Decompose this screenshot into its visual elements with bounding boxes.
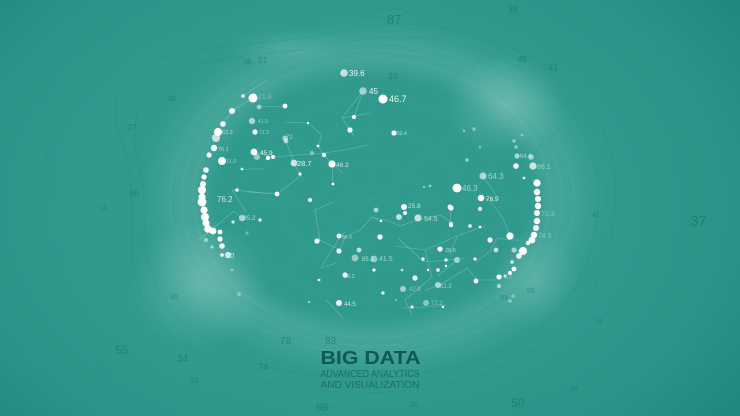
background numbers: 30 bbox=[170, 294, 178, 301]
background numbers: 34 bbox=[177, 354, 189, 365]
background numbers: 39 bbox=[508, 4, 518, 14]
node value labels: 72 bbox=[286, 135, 293, 141]
background numbers: 83 bbox=[325, 336, 337, 347]
node value labels: 45 bbox=[369, 87, 378, 96]
inner radial grid bbox=[210, 70, 535, 330]
heading: BIG DATA: BIG DATA bbox=[320, 347, 420, 368]
node value labels: 72.2 bbox=[431, 301, 443, 307]
background numbers: 46 bbox=[518, 55, 527, 64]
node value labels: 28.7 bbox=[297, 159, 312, 168]
node value labels: 64.3 bbox=[488, 172, 504, 181]
node value labels: 54.5 bbox=[424, 216, 438, 223]
background numbers: 55 bbox=[115, 343, 129, 357]
outer ring cluster: right bbox=[497, 134, 541, 303]
node value labels: 28.9 bbox=[445, 248, 456, 254]
background numbers: 50 bbox=[511, 396, 525, 410]
node value labels: 45.9 bbox=[260, 150, 273, 157]
node value labels bbox=[217, 69, 555, 308]
background numbers: 14 bbox=[100, 206, 107, 212]
node value labels: 44.5 bbox=[344, 302, 356, 308]
node value labels: 25.8 bbox=[408, 203, 421, 210]
background numbers: 86 bbox=[130, 189, 139, 198]
node value labels: 11.8 bbox=[226, 159, 236, 165]
node value labels: 76.1 bbox=[218, 147, 229, 153]
node value labels: 86.4 bbox=[342, 235, 352, 241]
node value labels: 7.6 bbox=[516, 250, 526, 257]
node value labels: 21.9 bbox=[258, 94, 272, 101]
node value labels: 85.2 bbox=[362, 257, 374, 263]
background numbers: 78 bbox=[280, 336, 292, 347]
subtitle: ADVANCED ANALYTICS bbox=[320, 369, 420, 380]
node value labels: 86.1 bbox=[537, 164, 551, 171]
background numbers: 31 bbox=[410, 402, 418, 409]
node value labels: 74.5 bbox=[538, 233, 552, 240]
background numbers: 39 bbox=[168, 96, 176, 103]
background numbers: 52 bbox=[596, 319, 603, 325]
background numbers: 36 bbox=[244, 59, 252, 66]
background numbers: 59 bbox=[527, 288, 535, 295]
node value labels: 39.6 bbox=[349, 69, 365, 78]
outer ring cluster: left bbox=[198, 94, 258, 296]
node value labels: 46.3 bbox=[462, 184, 478, 193]
background numbers: 37 bbox=[690, 213, 707, 230]
background numbers: 41 bbox=[592, 213, 599, 219]
background numbers: 53 bbox=[500, 295, 508, 302]
node value labels: 64.6 bbox=[520, 154, 532, 160]
network links bbox=[199, 80, 523, 318]
background numbers: 87 bbox=[387, 12, 401, 27]
background numbers: 27 bbox=[128, 123, 137, 132]
subtitle bbox=[320, 369, 420, 391]
background numbers: 31 bbox=[548, 62, 558, 72]
glow contour lines bbox=[170, 42, 574, 354]
node value labels: 41.9 bbox=[258, 119, 268, 125]
background numbers: 82 bbox=[191, 378, 199, 385]
title bbox=[320, 347, 420, 391]
node value labels: 86.2 bbox=[344, 274, 355, 280]
node value labels: 53 bbox=[505, 275, 512, 281]
node value labels: 63.3 bbox=[222, 130, 233, 136]
node value labels: 41.5 bbox=[379, 256, 393, 263]
node value labels: 71.3 bbox=[541, 211, 555, 218]
background numbers: 74 bbox=[258, 362, 268, 372]
node value labels: 52.4 bbox=[397, 131, 407, 137]
node value labels: 51.2 bbox=[440, 284, 452, 290]
node value labels: 76.2 bbox=[217, 195, 233, 204]
node value labels: 46.3 bbox=[336, 162, 349, 169]
node value labels: 95.2 bbox=[243, 215, 256, 222]
node value labels: 71.3 bbox=[259, 130, 269, 136]
background numbers: 32 bbox=[571, 386, 579, 393]
background numbers: 27 bbox=[258, 56, 267, 65]
node value labels: 46.7 bbox=[389, 94, 407, 104]
background numbers: 29 bbox=[388, 71, 398, 81]
data nodes bbox=[231, 69, 517, 309]
background numbers: 89 bbox=[316, 402, 328, 414]
subtitle: AND VISUALIZATION bbox=[320, 380, 420, 391]
node value labels: 76.9 bbox=[486, 196, 499, 203]
node value labels: 42.9 bbox=[409, 287, 421, 293]
node value labels: 10 bbox=[226, 251, 234, 260]
